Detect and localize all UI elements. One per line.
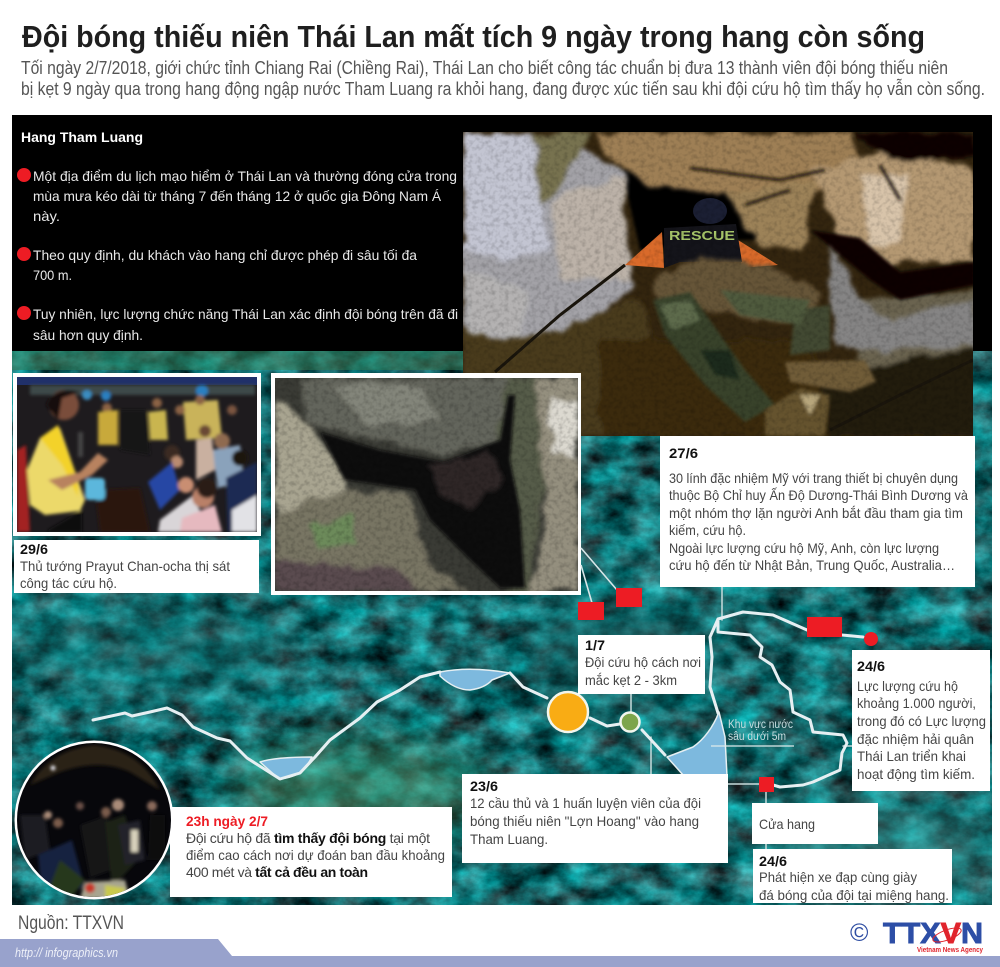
- source: Nguồn: TTXVN: [18, 913, 124, 934]
- map: satellite background: [0, 340, 1000, 905]
- cave floor mud: [463, 290, 980, 436]
- grain: [463, 132, 973, 436]
- callout: 23h 2/7 found alive: điểm cao cách nơi dự đoán ban đầu khoảng: [186, 847, 445, 863]
- tan ceiling rock: [595, 133, 975, 275]
- fact 3: sâu hơn quy định.: [33, 327, 143, 343]
- callout: 24/6 bicycles: đá bóng của đội tại miệng hang.: [759, 887, 949, 903]
- panel backdrop: [12, 115, 463, 349]
- callout: 1/7: [578, 635, 705, 694]
- panel: Hang Tham Luang facts: [12, 115, 463, 349]
- callout: 24/6 rescue force: [852, 650, 990, 791]
- callout: 27/6: kiếm, cứu hộ.: [669, 522, 746, 538]
- logo: TTXVN: TTXVN: [883, 918, 983, 950]
- callout: 1/7: 1/7: [585, 637, 605, 653]
- callout: 24/6 rescue force: khoảng 1.000 người,: [857, 695, 976, 711]
- callout: 27/6: [660, 436, 975, 587]
- cave route map: [93, 587, 863, 850]
- callout: 23/6: 23/6: [470, 778, 498, 794]
- callout: 27/6: cứu hộ đến từ Nhật Bản, Trung Quốc, Australia…: [669, 557, 955, 573]
- label: flooded zone: Khu vực nước: [728, 719, 793, 731]
- callout: cave mouth: [752, 803, 878, 844]
- marker: green point: [620, 712, 640, 732]
- footer bar: [0, 939, 1000, 967]
- callout: 23/6: Tham Luang.: [470, 831, 548, 847]
- fact 2: 700 m.: [33, 267, 72, 283]
- callout: 23h 2/7 found alive: 23h ngày 2/7: [186, 813, 268, 829]
- callout: 29/6: 29/6: [20, 541, 48, 557]
- panel: black cave information background: [12, 115, 992, 351]
- callout: 27/6: Ngoài lực lượng cứu hộ Mỹ, Anh, còn lực lượng: [669, 540, 939, 556]
- ceiling crevices: [690, 165, 900, 205]
- callout: 24/6 bicycles: 24/6: [759, 853, 787, 869]
- copyright symbol: ©: [850, 919, 869, 947]
- logo tagline: Vietnam News Agency: [917, 947, 983, 954]
- connector lines from cave photo to markers: [581, 548, 617, 603]
- footer url: http:// infographics.vn: [15, 945, 118, 960]
- label: flooded zone: [711, 719, 794, 746]
- fact 3: [17, 306, 458, 343]
- black cave opening: [622, 169, 758, 251]
- callout: 27/6: 30 lính đặc nhiệm Mỹ với trang thiết bị chuyên dụng: [669, 470, 958, 486]
- callout: 23h 2/7 found alive: Đội cứu hộ đã tìm thấy đội bóng tại một: [186, 830, 430, 846]
- callout: 24/6 rescue force: Thái Lan triển khai: [857, 748, 966, 764]
- callout: 24/6 rescue force: hoạt động tìm kiếm.: [857, 766, 975, 782]
- rope: [495, 265, 973, 430]
- marker: orange chamber: [548, 692, 588, 732]
- callout: 29/6: công tác cứu hộ.: [20, 575, 117, 591]
- minister shirt: [27, 428, 85, 515]
- fact 3: Tuy nhiên, lực lượng chức năng Thái Lan xác định đội bóng trên đã đi: [33, 306, 458, 322]
- helmet: [693, 198, 727, 224]
- dark crack under ceiling: [810, 230, 975, 300]
- pale limestone wall: [463, 133, 632, 340]
- main cave passage: [93, 612, 863, 787]
- callout: 27/6: thuộc Bộ Chỉ huy Ấn Độ Dương-Thái Bình Dương và: [669, 487, 968, 503]
- callout: 24/6 bicycles: Phát hiện xe đạp cùng giày: [759, 869, 917, 885]
- title: Đội bóng thiếu niên Thái Lan mất tích 9 ngày trong hang còn sống: [22, 19, 925, 54]
- callout: 23/6: bóng thiếu niên "Lợn Hoang" vào hang: [470, 813, 699, 829]
- photo scene: [17, 377, 257, 532]
- grey stalagmite: [830, 245, 975, 352]
- flooded lake 2: [440, 669, 510, 690]
- muddy back: [652, 258, 820, 325]
- fact 1: Một địa điểm du lịch mạo hiểm ở Thái Lan và thường đóng cửa trong: [33, 168, 457, 184]
- callout: 29/6: [14, 540, 259, 593]
- callout: 27/6: 27/6: [669, 445, 698, 461]
- callout: 23h 2/7 found alive: [170, 807, 452, 897]
- vest lettering: RESCUE: [669, 228, 735, 243]
- label: flooded zone: sâu dưới 5m: [728, 731, 786, 743]
- white frame: [271, 373, 581, 595]
- white ring: [14, 740, 174, 900]
- flooded lake 1: [260, 757, 312, 778]
- photo: Prime Minister Prayut visiting rescuers: [13, 373, 261, 536]
- callout: 23/6: 12 cầu thủ và 1 huấn luyện viên của đội: [470, 795, 701, 811]
- connector lines: [631, 587, 852, 850]
- callout: 23h 2/7 found alive: 400 mét và tất cả đều an toàn: [186, 864, 368, 880]
- fact 1: mùa mưa kéo dài từ tháng 7 đến tháng 12 ở quốc gia Đông Nam Á: [33, 188, 442, 204]
- callout: 1/7: Đội cứu hộ cách nơi: [585, 654, 701, 670]
- callout: 23/6: [462, 774, 728, 863]
- fact 1: này.: [33, 208, 60, 224]
- orange vest: [625, 232, 778, 268]
- callout: 24/6 rescue force: Lực lượng cứu hộ: [857, 678, 958, 694]
- panel heading: Hang Tham Luang: [21, 129, 143, 145]
- photo scene: [275, 378, 578, 591]
- red markers: [578, 588, 878, 792]
- boots: [765, 360, 876, 436]
- white frame: [13, 373, 261, 536]
- photo scene: [15, 741, 173, 899]
- callout: 24/6 bicycles: [753, 849, 952, 903]
- callout: 24/6 rescue force: đặc nhiệm hải quân: [857, 731, 974, 747]
- callout: 1/7: mắc kẹt 2 - 3km: [585, 672, 677, 688]
- rescue vest: [664, 224, 742, 268]
- callout: 24/6 rescue force: 24/6: [857, 658, 885, 674]
- callout: 24/6 rescue force: trong đó có Lực lượng: [857, 713, 986, 729]
- subtitle: [21, 58, 985, 99]
- photo: rescuers found the team (circle): [14, 740, 174, 900]
- flooded lake 3: [667, 712, 727, 776]
- camouflage legs: [653, 290, 830, 422]
- callout: 29/6: Thủ tướng Prayut Chan-ocha thị sát: [20, 558, 230, 574]
- fact 1: [17, 168, 457, 224]
- fact 2: [17, 247, 417, 283]
- callout: cave mouth: Cửa hang: [759, 816, 815, 832]
- photo: cave entrance rocks: [271, 373, 581, 595]
- logo globe: [931, 925, 963, 945]
- callout: 27/6: một nhóm thợ lặn người Anh bắt đầu tham gia tìm: [669, 505, 963, 521]
- photo: rescuer crawling in the cave: [463, 132, 980, 436]
- fact 2: Theo quy định, du khách vào hang chỉ được phép đi sâu tối đa: [33, 247, 417, 263]
